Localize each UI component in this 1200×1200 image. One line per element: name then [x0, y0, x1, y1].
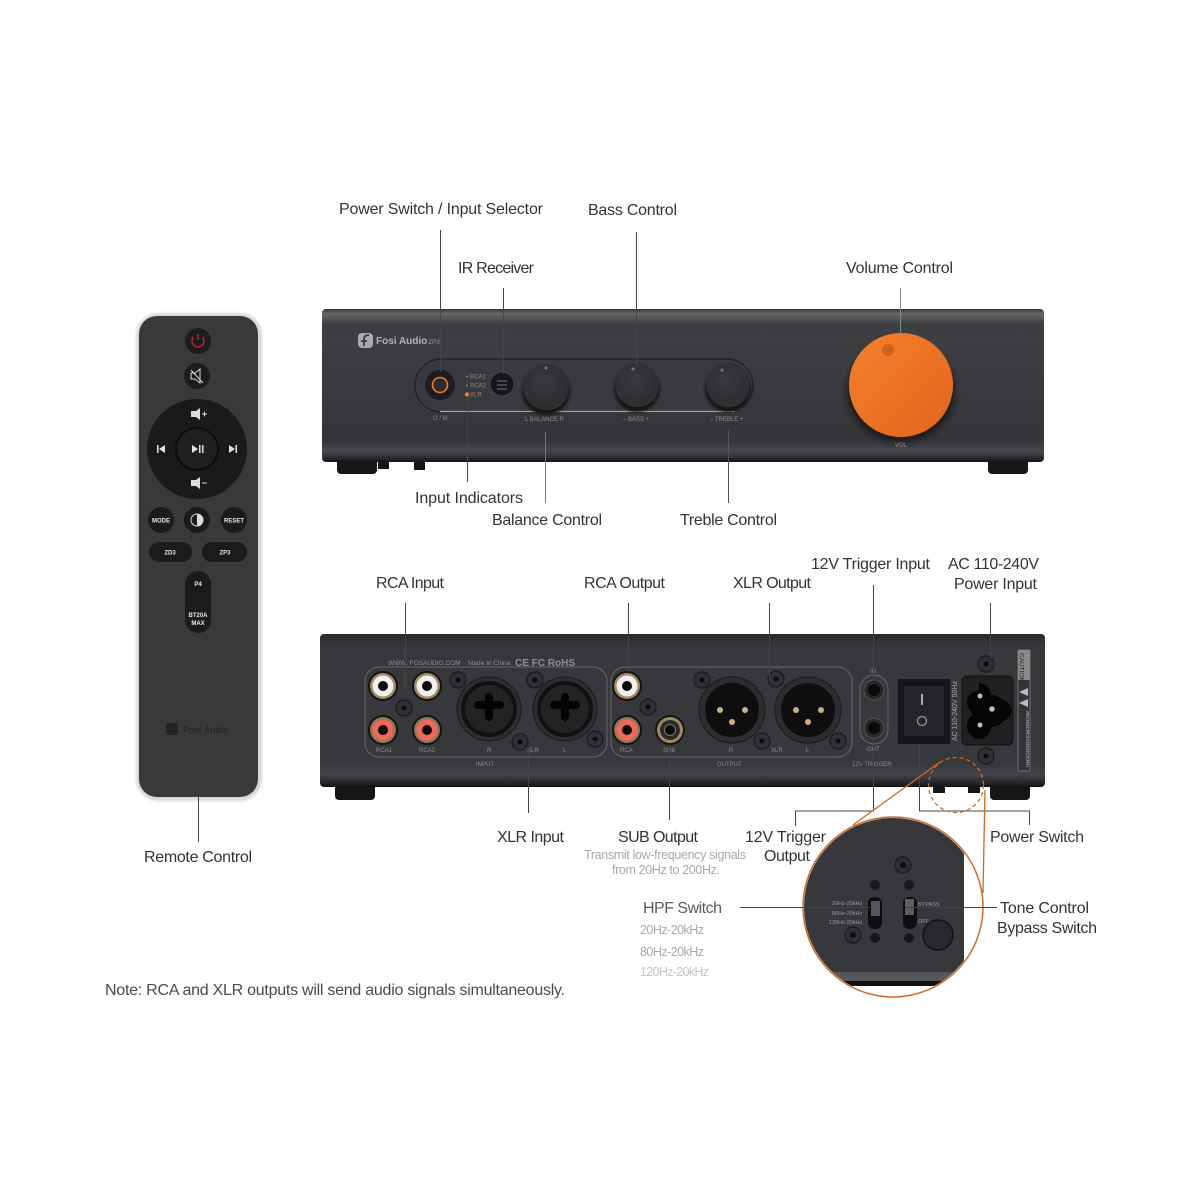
label: Input Indicators: Input Indicators [415, 490, 523, 507]
label: Tone Control Bypass Switch: Tone Control [1000, 900, 1089, 917]
magnified inset: switches: BYPASS [918, 902, 940, 908]
label: HPF Switch with modes: 20Hz-20kHz [640, 923, 704, 937]
remote buttons: mode, contrast, reset [148, 507, 247, 533]
power button [425, 370, 455, 422]
RCA2 R [412, 715, 442, 745]
label: Balance Control: Balance Control [492, 512, 602, 529]
treble knob: – TREBLE + [710, 417, 744, 423]
bypass slide switch [903, 897, 917, 929]
label: AC power input: Power Input [954, 576, 1038, 593]
voltage print: AC 110-240V 50Hz [952, 680, 959, 741]
label: Tone Control Bypass Switch: Bypass Switch [997, 920, 1097, 937]
label: XLR Output: XLR Output [733, 575, 812, 592]
label: HPF Switch with modes: HPF Switch [643, 900, 722, 917]
remote buttons: mode, contrast, reset: RESET [224, 518, 244, 524]
volume knob [847, 333, 955, 449]
output section: L [806, 748, 810, 754]
AC power inlet [962, 656, 1013, 764]
amplifier rear panel [320, 634, 1045, 800]
input section: R [487, 748, 492, 754]
caution label: RISK OF ELECTRIC SHOCK DO NOT OPEN [1025, 711, 1030, 767]
input section [365, 667, 607, 768]
label: Power Switch: Power Switch [990, 829, 1084, 846]
magnified inset: switches: 80Hz-20kHz [832, 911, 863, 917]
remote button: P4 / BT20A MAX [185, 571, 211, 633]
treble knob [705, 363, 751, 423]
rear top print: CE FC RoHS [515, 658, 575, 669]
HPF slide switch [868, 897, 882, 929]
output section [611, 667, 852, 768]
label: HPF Switch with modes [640, 900, 722, 979]
input section: L [563, 748, 567, 754]
rear top print: WWW. FOSAUDIO.COM [388, 660, 461, 667]
remote logo: Fosi Audio [183, 725, 230, 735]
remote buttons: mode, contrast, reset: MODE [152, 518, 170, 524]
label: 12V Trigger Output [745, 829, 827, 865]
12V trigger jacks: OUT [867, 747, 880, 753]
remote d-pad [147, 399, 247, 499]
input section: XLR [527, 748, 539, 754]
label: Treble Control: Treble Control [680, 512, 777, 529]
output RCA R [612, 715, 642, 745]
combo jack L [533, 677, 597, 741]
brand logo: Fosi Audio [376, 336, 427, 347]
label: AC power input [948, 556, 1039, 593]
remote buttons: ZD3, ZP3: ZD3 [164, 550, 176, 556]
rear top print: Made In China [468, 660, 511, 667]
rear feet [335, 783, 1030, 800]
balance knob [522, 364, 570, 423]
rocker power switch [898, 679, 950, 744]
RCA1 R [368, 715, 398, 745]
input indicators: RCA1 [470, 374, 487, 380]
RCA1 L [368, 671, 398, 701]
12V trigger jacks: 12V TRIGGER [852, 762, 892, 768]
label: RCA Output: RCA Output [584, 575, 666, 592]
remote logo [166, 723, 230, 735]
magnified inset: switches: OFF [918, 919, 930, 925]
label: Power Switch / Input Selector: Power Switch / Input Selector [339, 201, 544, 218]
front feet [337, 458, 1028, 474]
caution label: CAUTION [1018, 653, 1024, 683]
HPF and tone bypass leader lines [740, 906, 997, 908]
bypass push button [923, 920, 953, 950]
output section: RCA [620, 748, 633, 754]
XLR L [775, 677, 841, 743]
label: SUB Output with note: Transmit low-frequency signals [584, 848, 746, 862]
XLR R [699, 677, 765, 743]
label: Volume Control: Volume Control [846, 260, 953, 277]
label: Tone Control Bypass Switch [997, 900, 1097, 937]
input indicators: RCA2 [470, 384, 487, 390]
magnified inset: switches: 120Hz-20kHz [829, 920, 863, 926]
IR receiver [490, 372, 514, 396]
label: SUB Output with note: SUB Output [618, 829, 699, 846]
remote buttons: ZD3, ZP3 [149, 542, 247, 562]
label: XLR Input: XLR Input [497, 829, 565, 846]
label: HPF Switch with modes: 120Hz-20kHz [640, 965, 709, 979]
remote button: mute [184, 363, 210, 389]
leader lines [198, 230, 1030, 842]
RCA2 L [412, 671, 442, 701]
label: SUB Output with note: from 20Hz to 200Hz. [612, 863, 720, 877]
label: IR Receiver: IR Receiver [458, 260, 535, 277]
output section: R [729, 748, 734, 754]
input indicators: XLR [470, 392, 482, 398]
label: 12V Trigger Output: 12V Trigger [745, 829, 827, 846]
label: HPF Switch with modes: 80Hz-20kHz [640, 945, 704, 959]
power button: O / M [433, 416, 448, 422]
input section: RCA2 [419, 748, 436, 754]
label: 12V Trigger Output: Output [764, 848, 811, 865]
remote buttons: ZD3, ZP3: ZP3 [219, 550, 231, 556]
12V trigger jacks [852, 669, 892, 768]
label: SUB Output with note [584, 829, 746, 877]
balance knob: L BALANCE R [525, 417, 564, 423]
input indicators [465, 374, 487, 398]
SUB jack [655, 715, 685, 745]
combo jack R [457, 677, 521, 741]
output section: SUB [663, 748, 675, 754]
label: AC power input: AC 110-240V [948, 556, 1039, 573]
caution label [1018, 650, 1030, 771]
label: 12V Trigger Input: 12V Trigger Input [811, 556, 931, 573]
remote button: power [185, 328, 211, 354]
magnifier: dashed circle and connector lines [853, 758, 985, 893]
control pill outline [415, 359, 753, 412]
bass knob [614, 363, 660, 423]
remote button: P4 / BT20A MAX: BT20A [188, 613, 208, 619]
brand logo [358, 333, 440, 348]
label: Bass Control: Bass Control [588, 202, 677, 219]
volume knob: VOL [895, 443, 908, 449]
12V trigger jacks: IN [870, 669, 876, 675]
magnified inset: switches [800, 815, 983, 997]
input section: INPUT [476, 762, 494, 768]
amplifier front panel [322, 309, 1044, 474]
output section: XLR [771, 748, 783, 754]
label: RCA Input: RCA Input [376, 575, 445, 592]
input section: RCA1 [376, 748, 393, 754]
rear top print [388, 658, 575, 669]
remote button: P4 / BT20A MAX: P4 [194, 582, 202, 588]
label: Remote Control: Remote Control [144, 849, 252, 866]
note: Note: RCA and XLR outputs will send audio signals simultaneously. [105, 982, 565, 999]
output RCA L [612, 671, 642, 701]
remote button: P4 / BT20A MAX: MAX [191, 621, 205, 627]
bass knob: – BASS + [623, 417, 650, 423]
output section: OUTPUT [717, 762, 742, 768]
remote control [136, 313, 262, 801]
brand logo: ZP3 [428, 339, 440, 346]
magnified inset: switches: 20Hz-20kHz [832, 901, 863, 907]
